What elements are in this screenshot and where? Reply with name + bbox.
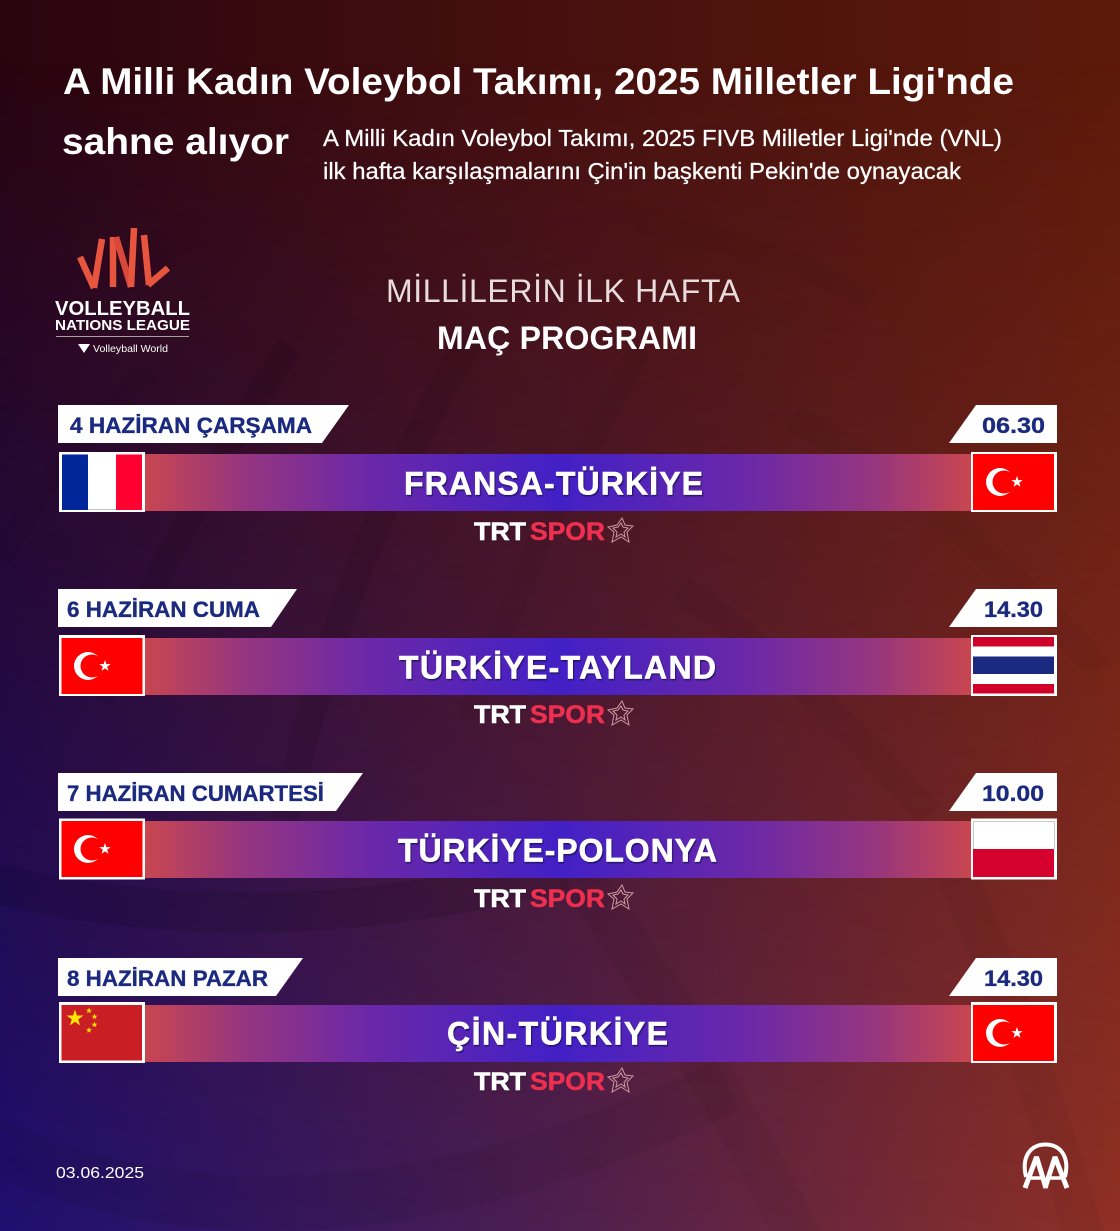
broadcaster: TRT Spor: SPOR	[530, 701, 605, 729]
broadcaster: TRT Spor: SPOR	[530, 1068, 605, 1096]
broadcaster: TRT Spor	[474, 518, 633, 546]
broadcaster: TRT Spor: TRT	[474, 701, 526, 729]
title: A Milli Kadın Voleybol Takımı, 2025 Milletler Ligi'nde	[63, 61, 1014, 102]
time label	[949, 589, 1057, 627]
broadcaster: TRT Spor: SPOR	[530, 518, 605, 546]
match bar	[145, 821, 971, 878]
match bar	[145, 454, 971, 511]
time label	[949, 773, 1057, 811]
match bar	[145, 638, 971, 695]
subtitle	[323, 125, 1002, 184]
broadcaster: TRT Spor: TRT	[474, 885, 526, 913]
subtitle: A Milli Kadın Voleybol Takımı, 2025 FIVB Milletler Ligi'nde (VNL)	[323, 125, 1002, 151]
date label: 7 HAZİRAN CUMARTESİ	[67, 781, 324, 806]
match row: China - Türkiye	[58, 958, 1057, 1096]
logo: Anadolu Agency	[1025, 1144, 1067, 1188]
broadcaster: TRT Spor	[474, 701, 633, 729]
title	[62, 61, 1014, 162]
match title: TÜRKİYE-TAYLAND	[399, 650, 716, 686]
time label: 14.30	[984, 966, 1043, 991]
time label	[949, 405, 1057, 443]
flag: Poland	[971, 818, 1057, 880]
heading: match programme	[386, 273, 741, 356]
time label	[949, 958, 1057, 996]
match title: ÇİN-TÜRKİYE	[447, 1016, 668, 1052]
subtitle: ilk hafta karşılaşmalarını Çin'in başkenti Pekin'de oynayacak	[323, 158, 962, 184]
logo: Volleyball Nations League: VOLLEYBALL	[55, 298, 190, 320]
broadcaster: TRT Spor: TRT	[474, 1068, 526, 1096]
date label	[58, 589, 297, 627]
flag: Türkiye	[971, 452, 1057, 512]
match title: TÜRKİYE-POLONYA	[398, 832, 717, 868]
match title: FRANSA-TÜRKİYE	[404, 466, 703, 502]
date: 03.06.2025	[56, 1165, 144, 1182]
match row: Türkiye - Poland	[58, 773, 1057, 913]
date label: 6 HAZİRAN CUMA	[67, 597, 260, 622]
match bar	[145, 1005, 971, 1062]
flag: Türkiye	[59, 818, 145, 880]
logo: Volleyball Nations League	[55, 228, 190, 355]
date label	[58, 773, 363, 811]
time label: 06.30	[982, 413, 1045, 438]
broadcaster: TRT Spor	[474, 885, 633, 913]
logo: Volleyball Nations League: Volleyball World	[93, 343, 168, 355]
broadcaster: TRT Spor: SPOR	[530, 885, 605, 913]
match row: Türkiye - Thailand	[58, 589, 1057, 729]
flag: Türkiye	[59, 635, 145, 696]
flag: Türkiye	[971, 1002, 1057, 1063]
broadcaster: TRT Spor	[474, 1068, 633, 1096]
date label: 4 HAZİRAN ÇARŞAMA	[70, 413, 312, 438]
logo: Volleyball Nations League: NATIONS LEAGUE	[55, 317, 190, 334]
flag: China	[59, 1002, 145, 1063]
broadcaster: TRT Spor: TRT	[474, 518, 526, 546]
date label	[58, 958, 303, 996]
title: sahne alıyor	[62, 121, 289, 162]
date label: 8 HAZİRAN PAZAR	[67, 966, 268, 991]
match row: France - Türkiye	[58, 405, 1057, 546]
flag: France	[59, 452, 145, 512]
time label: 14.30	[984, 597, 1043, 622]
time label: 10.00	[982, 781, 1044, 806]
heading: match programme: MİLLİLERİN İLK HAFTA	[386, 273, 741, 309]
date label	[58, 405, 349, 443]
heading: match programme: MAÇ PROGRAMI	[437, 320, 697, 356]
flag: Thailand	[971, 635, 1057, 696]
